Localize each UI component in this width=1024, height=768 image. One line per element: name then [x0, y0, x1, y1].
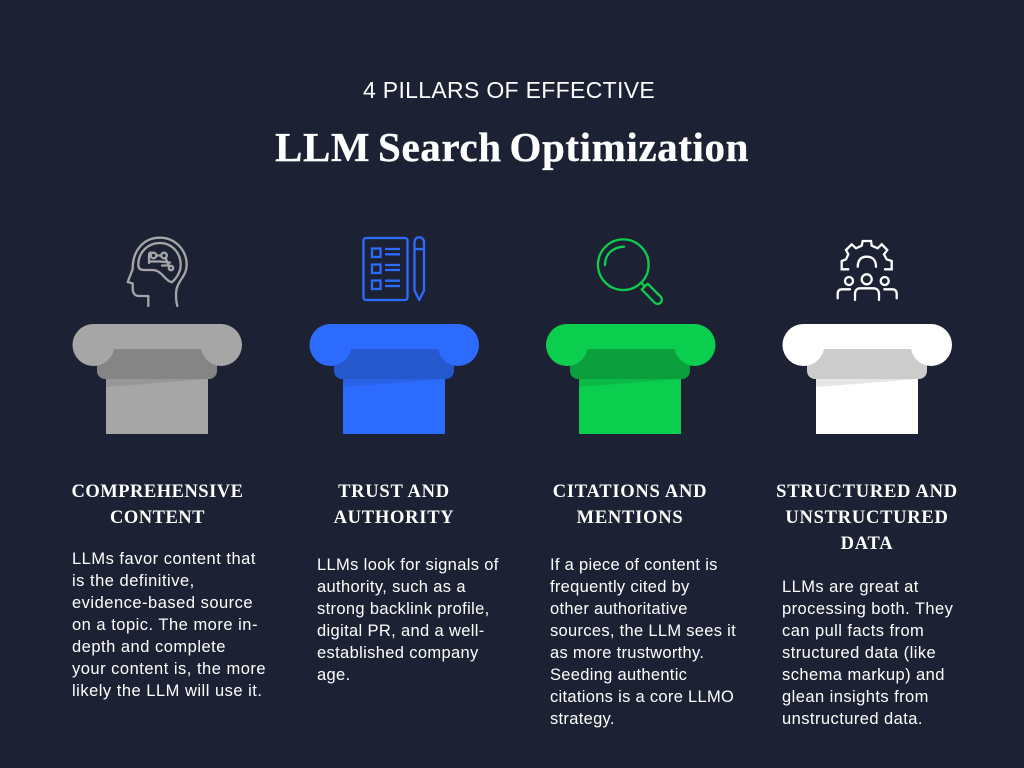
heading: citations and mentions: CITATIONS AND [553, 482, 707, 502]
pillar: structured and unstructured data [782, 324, 952, 434]
heading: trust and authority [334, 482, 454, 528]
text: trust and authority: age. [317, 666, 351, 684]
text: citations and mentions: citations is a core LLMO [550, 688, 734, 706]
pillar: trust and authority [309, 324, 479, 434]
heading: comprehensive content: COMPREHENSIVE [72, 482, 244, 502]
text: structured and unstructured data [782, 578, 953, 728]
pillar: citations and mentions [546, 324, 716, 434]
pillar: comprehensive content [72, 324, 242, 434]
text: trust and authority: authority, such as a [317, 578, 466, 596]
text: comprehensive content: likely the LLM will use it. [72, 682, 262, 700]
text: comprehensive content [72, 550, 266, 700]
heading: comprehensive content: CONTENT [110, 508, 205, 528]
heading: structured and unstructured data: STRUCTURED AND [776, 482, 958, 502]
text: trust and authority: strong backlink profile, [317, 600, 490, 618]
text: structured and unstructured data: LLMs are great at [782, 578, 919, 596]
heading: comprehensive content [72, 482, 244, 528]
text: comprehensive content: depth and complete [72, 638, 226, 656]
title: LLM Search Optimization [275, 124, 749, 170]
heading: trust and authority: AUTHORITY [334, 508, 454, 528]
icon: head with brain [128, 238, 187, 306]
icon: gear and team [838, 241, 897, 300]
text: comprehensive content: LLMs favor content that [72, 550, 256, 568]
heading: trust and authority: TRUST AND [338, 482, 450, 502]
text: citations and mentions: other authoritative [550, 600, 688, 618]
text: trust and authority: LLMs look for signals of [317, 556, 499, 574]
heading: structured and unstructured data: DATA [841, 534, 893, 554]
text: structured and unstructured data: processing both. They [782, 600, 953, 618]
text: trust and authority: digital PR, and a well- [317, 622, 485, 640]
text: citations and mentions: strategy. [550, 710, 615, 728]
text: comprehensive content: your content is, the more [72, 660, 266, 678]
heading: structured and unstructured data: UNSTRUCTURED [785, 508, 949, 528]
heading: citations and mentions [553, 482, 707, 528]
text: citations and mentions [550, 556, 736, 728]
text: structured and unstructured data: unstructured data. [782, 710, 923, 728]
text: structured and unstructured data: schema markup) and [782, 666, 945, 684]
text: structured and unstructured data: glean insights from [782, 688, 929, 706]
text: structured and unstructured data: structured data (like [782, 644, 936, 662]
text: citations and mentions: If a piece of content is [550, 556, 718, 574]
text: citations and mentions: frequently cited by [550, 578, 690, 596]
text: citations and mentions: Seeding authentic [550, 666, 687, 684]
text: comprehensive content: on a topic. The more in- [72, 616, 258, 634]
text: trust and authority: established company [317, 644, 479, 662]
icon: checklist and pencil [364, 237, 424, 300]
text: structured and unstructured data: can pull facts from [782, 622, 924, 640]
icon: magnifying glass [598, 239, 662, 304]
text: citations and mentions: sources, the LLM sees it [550, 622, 736, 640]
text: comprehensive content: evidence-based source [72, 594, 253, 612]
subtitle: 4 PILLARS OF EFFECTIVE [363, 77, 655, 103]
text: comprehensive content: is the definitive, [72, 572, 195, 590]
text: citations and mentions: as more trustworthy. [550, 644, 704, 662]
heading: citations and mentions: MENTIONS [577, 508, 683, 528]
text: trust and authority [317, 556, 499, 684]
heading: structured and unstructured data [776, 482, 958, 554]
